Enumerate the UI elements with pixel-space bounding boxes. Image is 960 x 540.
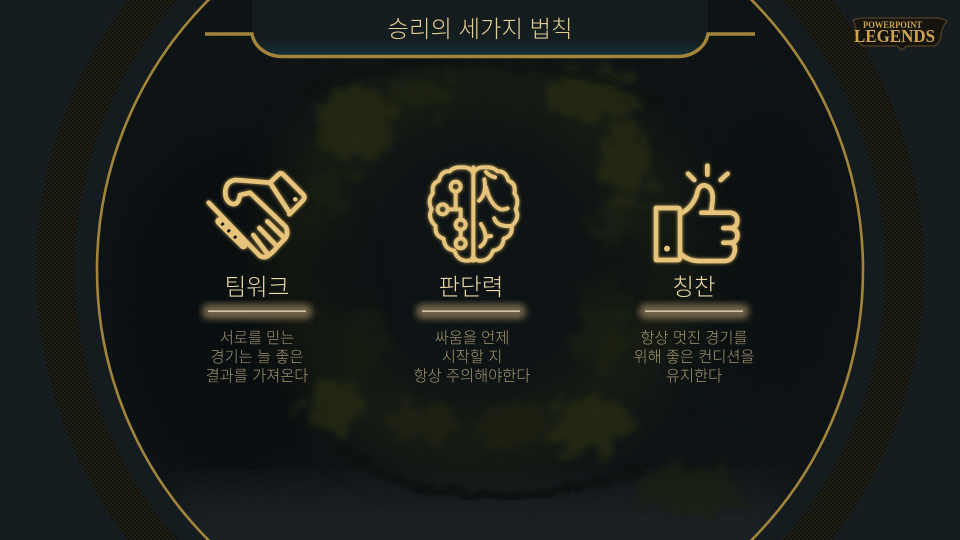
icon: handshake [204, 168, 310, 262]
logo: LEGENDS [854, 26, 935, 46]
panel: teamwork [198, 168, 316, 384]
icon: thumbs up [651, 161, 742, 266]
text: praise: 항상 멋진 경기를 [640, 330, 748, 346]
heading: praise: 칭찬 [672, 274, 716, 300]
heading: teamwork: 팀워크 [225, 274, 289, 300]
text: teamwork: 결과를 가져온다 [206, 368, 308, 384]
text: teamwork: 서로를 믿는 [220, 330, 294, 346]
text: teamwork [206, 330, 308, 384]
title: 승리의 세가지 법칙 [387, 16, 573, 42]
text: praise: 유지한다 [666, 368, 722, 384]
text: judgment: 항상 주의해야한다 [414, 368, 530, 384]
heading: judgment: 판단력 [439, 274, 503, 300]
text: judgment [414, 330, 530, 384]
panel: praise [633, 161, 755, 384]
title banner [205, 0, 755, 58]
divider: teamwork [198, 300, 316, 324]
divider: judgment [412, 300, 530, 324]
logo: POWERPOINT [863, 21, 923, 31]
text: teamwork: 경기는 늘 좋은 [211, 348, 303, 366]
text: judgment: 시작할 지 [442, 348, 502, 366]
text: praise: 위해 좋은 컨디션을 [633, 348, 755, 366]
logo [852, 17, 948, 51]
text: praise [633, 330, 755, 384]
divider: praise [635, 300, 753, 324]
text: judgment: 싸움을 언제 [435, 330, 509, 346]
panel: judgment [412, 162, 530, 384]
icon: brain [425, 162, 522, 266]
